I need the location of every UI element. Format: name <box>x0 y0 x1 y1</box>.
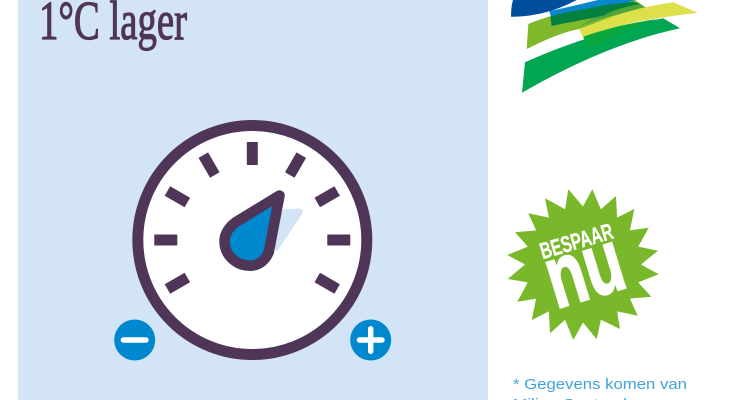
badge text: nu: nu <box>532 209 635 327</box>
dial tick marks <box>154 142 350 294</box>
icon: minus button <box>114 320 155 360</box>
dial: thermostat <box>138 126 367 354</box>
badge: bespaar nu <box>507 189 659 340</box>
footnote <box>513 376 687 400</box>
logo: coloured bands <box>511 0 698 93</box>
panel: light blue background <box>18 0 488 400</box>
badge text: bespaar: BESPAAR <box>537 218 616 264</box>
dial face <box>138 126 367 354</box>
badge starburst <box>507 189 659 340</box>
footnote: * Gegevens komen van <box>513 376 687 393</box>
dial needle: drop <box>224 196 280 266</box>
icon: plus button <box>350 320 391 360</box>
needle shadow <box>270 208 303 252</box>
